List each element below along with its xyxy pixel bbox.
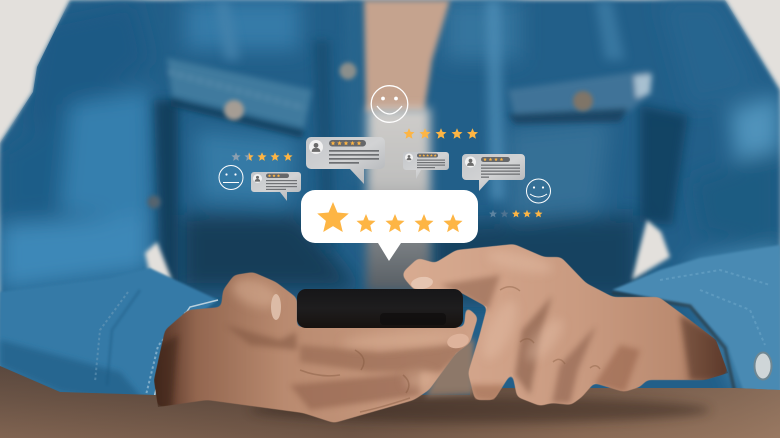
main rating speech bubble [301, 190, 478, 261]
right cuff [612, 245, 780, 395]
review card small centre [403, 152, 449, 179]
smile face icon right [526, 179, 550, 203]
large star [317, 202, 349, 232]
smartphone [297, 289, 463, 328]
left chest pocket flap [167, 58, 312, 138]
left hand [150, 272, 478, 423]
wooden table [0, 338, 780, 438]
neck skin [364, 0, 450, 112]
index fingernail [410, 276, 434, 290]
four small stars [356, 214, 463, 232]
right chest pocket flap [508, 70, 652, 124]
right hand shading [440, 246, 730, 403]
thumbnail [271, 294, 281, 320]
shirt buttons [148, 62, 593, 208]
left hand shading [150, 273, 465, 412]
left cuff [0, 268, 218, 408]
wall gap left of torso [145, 242, 172, 280]
review card large [306, 137, 385, 184]
review card right [462, 154, 525, 191]
five star row top [403, 128, 478, 139]
star row left, three and a half [231, 152, 293, 161]
cuff button [754, 352, 772, 380]
happy face icon top [371, 86, 408, 122]
star row right, three of five [489, 210, 542, 217]
right hand [403, 244, 730, 406]
fingertip under phone [446, 332, 470, 350]
white tee [366, 108, 431, 292]
neutral face icon left [219, 166, 243, 190]
review card left [251, 172, 301, 201]
wall gap right of torso [632, 220, 670, 280]
rating overlay graphics [219, 86, 550, 261]
